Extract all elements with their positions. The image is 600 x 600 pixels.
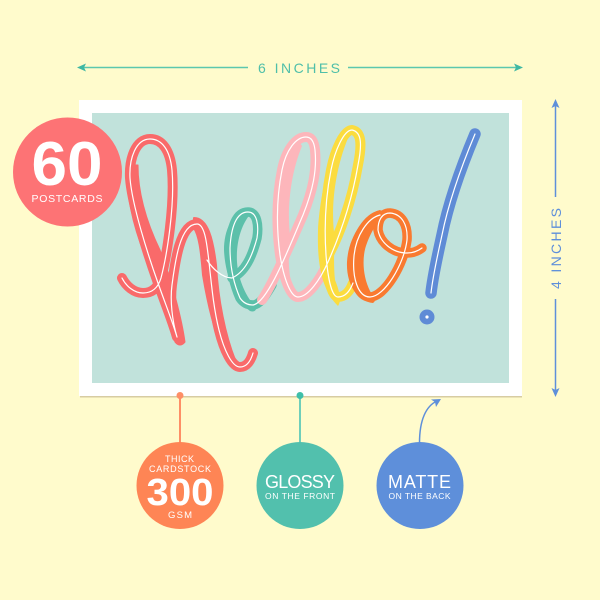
- white inline stroke: [122, 130, 475, 367]
- letter h: [122, 139, 253, 367]
- letter o: [347, 210, 422, 303]
- badge: glossy: [256, 442, 344, 529]
- badge: matte: ON THE BACK: [388, 491, 451, 501]
- arrow: matte on the back: [420, 399, 441, 443]
- badge: matte: [376, 442, 464, 529]
- badge: 60 postcards: [13, 118, 122, 226]
- postcard: [79, 100, 522, 398]
- connector: glossy: [296, 392, 304, 443]
- letter e: [224, 210, 272, 311]
- height dimension: 4 inches: [548, 99, 564, 397]
- badge: 60 postcards: 60: [32, 130, 102, 199]
- badge: glossy: GLOSSY: [265, 472, 335, 492]
- exclamation mark: [420, 134, 475, 324]
- badge: 300 gsm: GSM: [168, 510, 192, 521]
- badge: matte: MATTE: [388, 472, 451, 492]
- letter l, pink: [262, 137, 328, 300]
- badge: 300 gsm: [136, 442, 224, 529]
- connector: thick cardstock: [176, 392, 184, 443]
- badge: 60 postcards: POSTCARDS: [32, 193, 102, 205]
- badge: 300 gsm: CARDSTOCK: [149, 464, 211, 474]
- width dimension: 6 inches: 6 INCHES: [258, 60, 340, 76]
- letter l, yellow: [318, 130, 360, 306]
- white card: [79, 100, 522, 396]
- badge: 300 gsm: THICK: [165, 454, 194, 464]
- lettering: hello!: [122, 130, 475, 367]
- mint card face: [92, 113, 509, 383]
- badge: 300 gsm: 300: [146, 472, 214, 514]
- badge: glossy: ON THE FRONT: [265, 491, 335, 501]
- card shadow: [80, 102, 522, 398]
- width dimension: 6 inches: [77, 60, 523, 76]
- height dimension: 4 inches: 4 INCHES: [548, 208, 564, 289]
